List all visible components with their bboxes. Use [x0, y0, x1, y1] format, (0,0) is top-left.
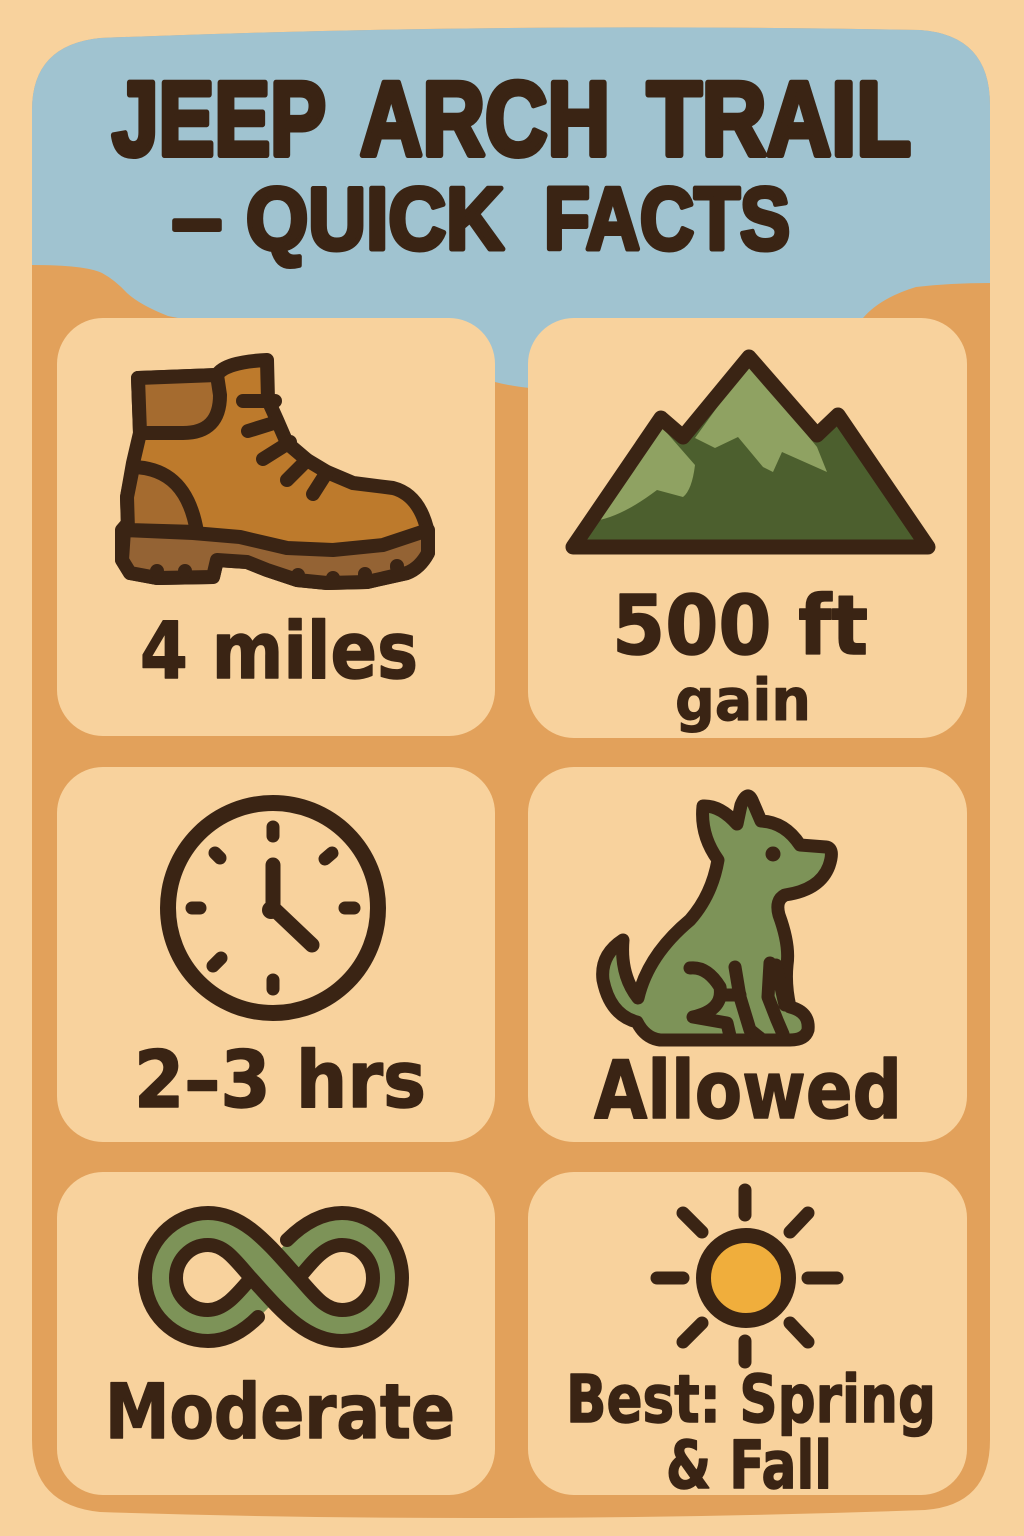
- panel: duration card: [57, 767, 495, 1142]
- panel: distance card: [57, 318, 495, 736]
- card background: [528, 767, 967, 1142]
- card background: [528, 318, 967, 738]
- icon: hiking boot: [122, 360, 428, 583]
- title line 1: ARCH: [360, 61, 610, 178]
- icon: sun: [657, 1190, 837, 1362]
- label: Allowed: Allowed: [594, 1044, 902, 1137]
- title line 1: JEEP: [112, 61, 326, 178]
- title line 1: [112, 61, 911, 178]
- title line 2: FACTS: [544, 169, 790, 268]
- icon: mountains: [573, 357, 928, 547]
- label: 2–3 hrs: 2–3 hrs: [134, 1036, 426, 1126]
- title line 2: QUICK: [246, 169, 504, 268]
- title line 1: TRAIL: [647, 61, 911, 178]
- label: gain: gain: [675, 666, 811, 734]
- icon: infinity loop: [145, 1213, 402, 1341]
- panel: difficulty card: [57, 1172, 495, 1495]
- label: 4 miles: 4 miles: [140, 607, 418, 697]
- card background: [528, 1172, 967, 1495]
- card background: [57, 318, 495, 736]
- label: 500 ft: 500 ft: [612, 579, 868, 674]
- icon: sitting dog: [603, 796, 831, 1040]
- panel: season card: [528, 1172, 967, 1504]
- card background: [57, 767, 495, 1142]
- title line 2: –: [172, 169, 222, 268]
- label: Moderate: Moderate: [105, 1367, 455, 1456]
- panel: sky with hills: [32, 27, 990, 388]
- title line 2: [172, 169, 790, 268]
- icon: clock: [168, 803, 378, 1013]
- panel: elevation card: [528, 318, 967, 738]
- label: Best: Spring: Best: Spring: [566, 1361, 936, 1438]
- card background: [57, 1172, 495, 1495]
- panel: dogs card: [528, 767, 967, 1142]
- title: [112, 61, 911, 268]
- label: & Fall: & Fall: [666, 1427, 832, 1504]
